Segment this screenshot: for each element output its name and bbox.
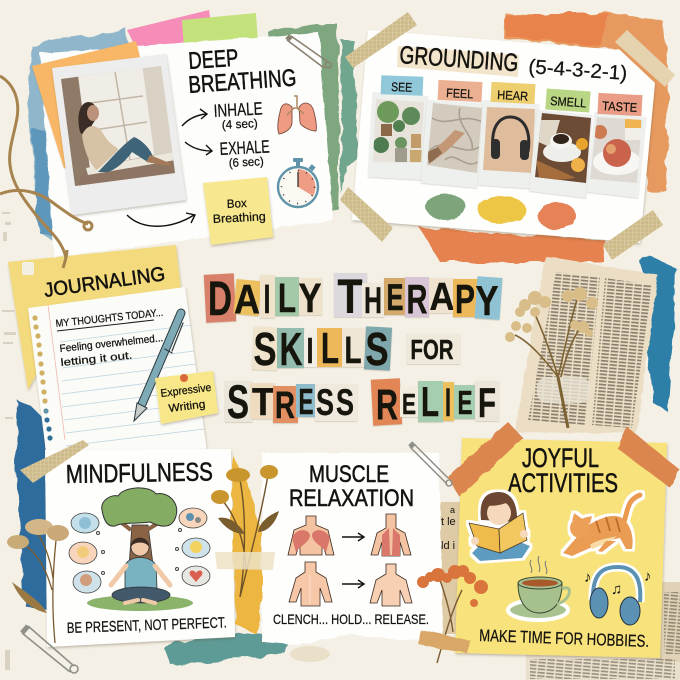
tape top right — [615, 30, 675, 87]
arrow: to exhale — [185, 142, 212, 155]
label: see — [381, 75, 423, 96]
thought bubble: cloud — [71, 513, 100, 534]
tape — [20, 440, 89, 483]
underline — [57, 320, 154, 331]
yellow brush stroke — [232, 455, 263, 633]
title word: therapy: H — [364, 280, 382, 321]
paint wash: teal bottom centre — [166, 632, 292, 666]
title word: stress: S — [316, 382, 334, 423]
torn white page — [262, 453, 443, 645]
sticker: person reading — [469, 492, 530, 561]
icon: lungs — [278, 96, 316, 134]
label: box: Box — [226, 196, 247, 211]
title word: daily — [204, 273, 322, 326]
title word: therapy: P — [455, 276, 475, 322]
title word: daily: A — [234, 276, 260, 322]
tape left — [447, 422, 523, 497]
tile: smell — [529, 88, 594, 198]
tape bottom left — [340, 187, 393, 242]
title word: stress: S — [227, 375, 249, 428]
title word: therapy — [334, 271, 502, 324]
pin — [180, 374, 188, 382]
label: smell — [545, 88, 591, 113]
title word: skills: S — [254, 323, 276, 375]
panel: deep breathing — [32, 33, 333, 257]
title word: therapy: E — [386, 277, 404, 318]
heading: mindfulness: MINDFULNESS — [66, 456, 213, 489]
arrow: hold to release — [342, 580, 364, 588]
panel: journaling — [8, 245, 218, 452]
heading: 5-4-3-2-1: (5-4-3-2-1) — [528, 56, 628, 85]
heading: breathing: BREATHING — [188, 65, 297, 99]
tile: see: SEE — [391, 80, 412, 95]
title word: for: FOR — [410, 334, 454, 365]
title word: daily: I — [264, 276, 270, 322]
paint wash: deep orange top of grounding — [504, 14, 610, 46]
clipping: lower left scraps: a — [450, 505, 455, 515]
icon: pen — [134, 313, 183, 421]
text: my thoughts today: MY THOUGHTS TODAY... — [55, 307, 164, 330]
paint wash: tan stain — [290, 646, 330, 662]
title word: relief: E — [458, 384, 472, 421]
title word: stress: R — [275, 385, 295, 427]
title word: skills: S — [366, 323, 388, 375]
arrow: to box breathing — [127, 213, 195, 226]
paint wash: green behind deep breathing — [268, 24, 340, 212]
thought bubble: brain — [73, 571, 104, 593]
arrow: clench to hold — [342, 533, 364, 541]
sticky: expressive writing — [155, 371, 218, 424]
label: expressive: Expressive — [160, 382, 212, 400]
title word: therapy: T — [338, 271, 362, 324]
text: feeling overwhelmed: Feeling overwhelmed... — [59, 332, 164, 355]
sticker: headphones — [584, 567, 652, 625]
clipping: lower left scraps: ld i — [441, 540, 455, 552]
heading: joyful: JOYFUL — [522, 443, 599, 473]
clipping: lower left scraps: t le — [441, 516, 456, 528]
text: inhale: INHALE — [213, 98, 263, 121]
paint wash: green left of grounding — [341, 40, 358, 195]
clipping: lower left scraps — [439, 502, 463, 634]
label: feel — [438, 80, 482, 102]
yellow paper — [455, 438, 667, 658]
label: breathing: Breathing — [212, 209, 266, 226]
panel: joyful activities — [447, 422, 680, 658]
tape right — [617, 427, 680, 488]
torso: releasing back — [289, 562, 332, 606]
text: letting it out: letting it out. — [60, 350, 133, 369]
tile: smell: SMELL — [550, 94, 587, 111]
torso: relaxed front — [370, 564, 412, 606]
tile: feel: FEEL — [446, 86, 474, 101]
title word: skills — [252, 323, 392, 375]
title word: relief: I — [445, 381, 451, 425]
label: writing: Writing — [168, 399, 206, 415]
torn white page — [40, 33, 333, 257]
thought bubble: gears — [178, 508, 207, 532]
tile: taste: TASTE — [602, 99, 638, 115]
label: taste — [597, 93, 642, 116]
text: 4 sec: (4 sec) — [221, 116, 258, 132]
title word: stress: S — [336, 382, 354, 423]
label: hear — [491, 82, 535, 104]
swatch: orange — [538, 202, 576, 230]
paint wash: orange below grounding — [420, 228, 605, 262]
twine — [0, 76, 92, 268]
text: 6 sec: (6 sec) — [228, 154, 264, 170]
title word: daily: L — [278, 275, 296, 321]
tile: see — [368, 75, 428, 180]
tape top left — [345, 12, 417, 68]
woman — [78, 102, 96, 135]
heading: activities: ACTIVITIES — [508, 468, 618, 498]
arrow: to inhale — [182, 109, 207, 126]
title word: relief: R — [376, 381, 398, 429]
panel: mindfulness — [20, 440, 235, 647]
heading: journaling: JOURNALING — [43, 263, 167, 302]
notebook page — [28, 287, 218, 452]
tile: feel — [421, 80, 485, 188]
icon: stopwatch — [278, 158, 318, 207]
text: exhale: EXHALE — [219, 136, 270, 159]
title word: daily: Y — [298, 275, 322, 321]
swatch: yellow — [478, 196, 526, 224]
thought bubble: calm face — [69, 542, 104, 564]
title word: skills: I — [306, 330, 314, 371]
thought bubble: heart — [176, 566, 210, 586]
tile: taste — [587, 93, 646, 198]
hole punch — [22, 262, 34, 275]
panel: grounding — [340, 12, 675, 260]
paint wash: blue left of mindfulness — [16, 400, 50, 610]
note: orange — [32, 41, 160, 168]
swatch: green — [426, 194, 466, 220]
tape bottom right — [418, 630, 470, 654]
paint wash: dark blue lower left of deep breathing — [32, 130, 60, 236]
title word: therapy: Y — [476, 277, 498, 324]
title word: relief — [371, 378, 499, 429]
dried flowers — [505, 287, 598, 428]
title word: daily: D — [208, 273, 232, 326]
title word: therapy: A — [430, 276, 454, 319]
title word: relief: F — [478, 379, 496, 426]
title word: skills: L — [344, 330, 362, 372]
paint wash: blue right of clipping — [640, 256, 676, 412]
illustration: meditating under tree — [87, 488, 193, 611]
sticker: stretching cat — [563, 495, 640, 556]
title word: stress: T — [252, 381, 274, 424]
sticky: box breathing — [203, 177, 273, 245]
icon: safety pin — [287, 36, 331, 68]
title word: relief: E — [402, 389, 416, 421]
heading highlight — [397, 46, 519, 77]
headphones photo — [491, 117, 529, 160]
heading: grounding: GROUNDING — [399, 41, 519, 77]
dried flowers: orange — [417, 565, 488, 663]
ruled lines — [60, 325, 204, 446]
margin line — [48, 305, 65, 440]
sticker: headphones: ♫ — [611, 581, 622, 598]
yellow torn note — [8, 245, 182, 390]
dried flower: left — [7, 519, 69, 643]
title word: stress: E — [298, 381, 314, 422]
note: lime — [182, 13, 258, 48]
title word: stress — [225, 375, 357, 428]
sticker: headphones: ♪ — [644, 568, 652, 585]
tile: hear — [478, 82, 539, 189]
distressed paint flecks — [2, 212, 16, 670]
paint wash: blue behind deep breathing — [28, 30, 130, 240]
dried flowers: yellow — [211, 465, 279, 597]
note: pink — [127, 10, 215, 50]
heading: muscle: MUSCLE — [309, 461, 389, 488]
title word: skills: L — [321, 324, 339, 373]
title word: skills: K — [280, 323, 302, 375]
sticker: cup of tea — [508, 556, 569, 620]
heading: relaxation: RELAXATION — [289, 485, 414, 512]
white page — [352, 30, 655, 243]
torso: tense back — [371, 514, 411, 556]
paint wash: orange behind grounding — [503, 12, 668, 192]
icon: safety pin lower left — [22, 626, 78, 673]
tape over flowers — [215, 552, 275, 570]
spiral rings — [32, 315, 53, 441]
heading: deep: DEEP — [188, 45, 239, 75]
torso: clenched front — [288, 516, 334, 555]
icon: safety pin — [410, 443, 452, 486]
title word: relief: L — [421, 378, 439, 425]
title word: therapy: R — [406, 276, 428, 322]
sticker: headphones: ♪ — [584, 569, 592, 586]
title — [204, 271, 502, 429]
tile: hear: HEAR — [497, 88, 529, 104]
polaroid photo of woman by window — [52, 54, 186, 215]
panel: muscle relaxation — [232, 443, 452, 645]
thought bubble: smile — [176, 538, 210, 558]
tape over stem — [537, 377, 590, 403]
clipping: bottom newspaper — [526, 582, 680, 680]
tape bottom right — [603, 210, 663, 260]
tagline: clench hold release: CLENCH... HOLD... RELEASE. — [273, 611, 429, 627]
tagline: be present: BE PRESENT, NOT PERFECT. — [67, 614, 227, 637]
white page — [45, 449, 235, 647]
dictionary clipping — [505, 256, 658, 433]
